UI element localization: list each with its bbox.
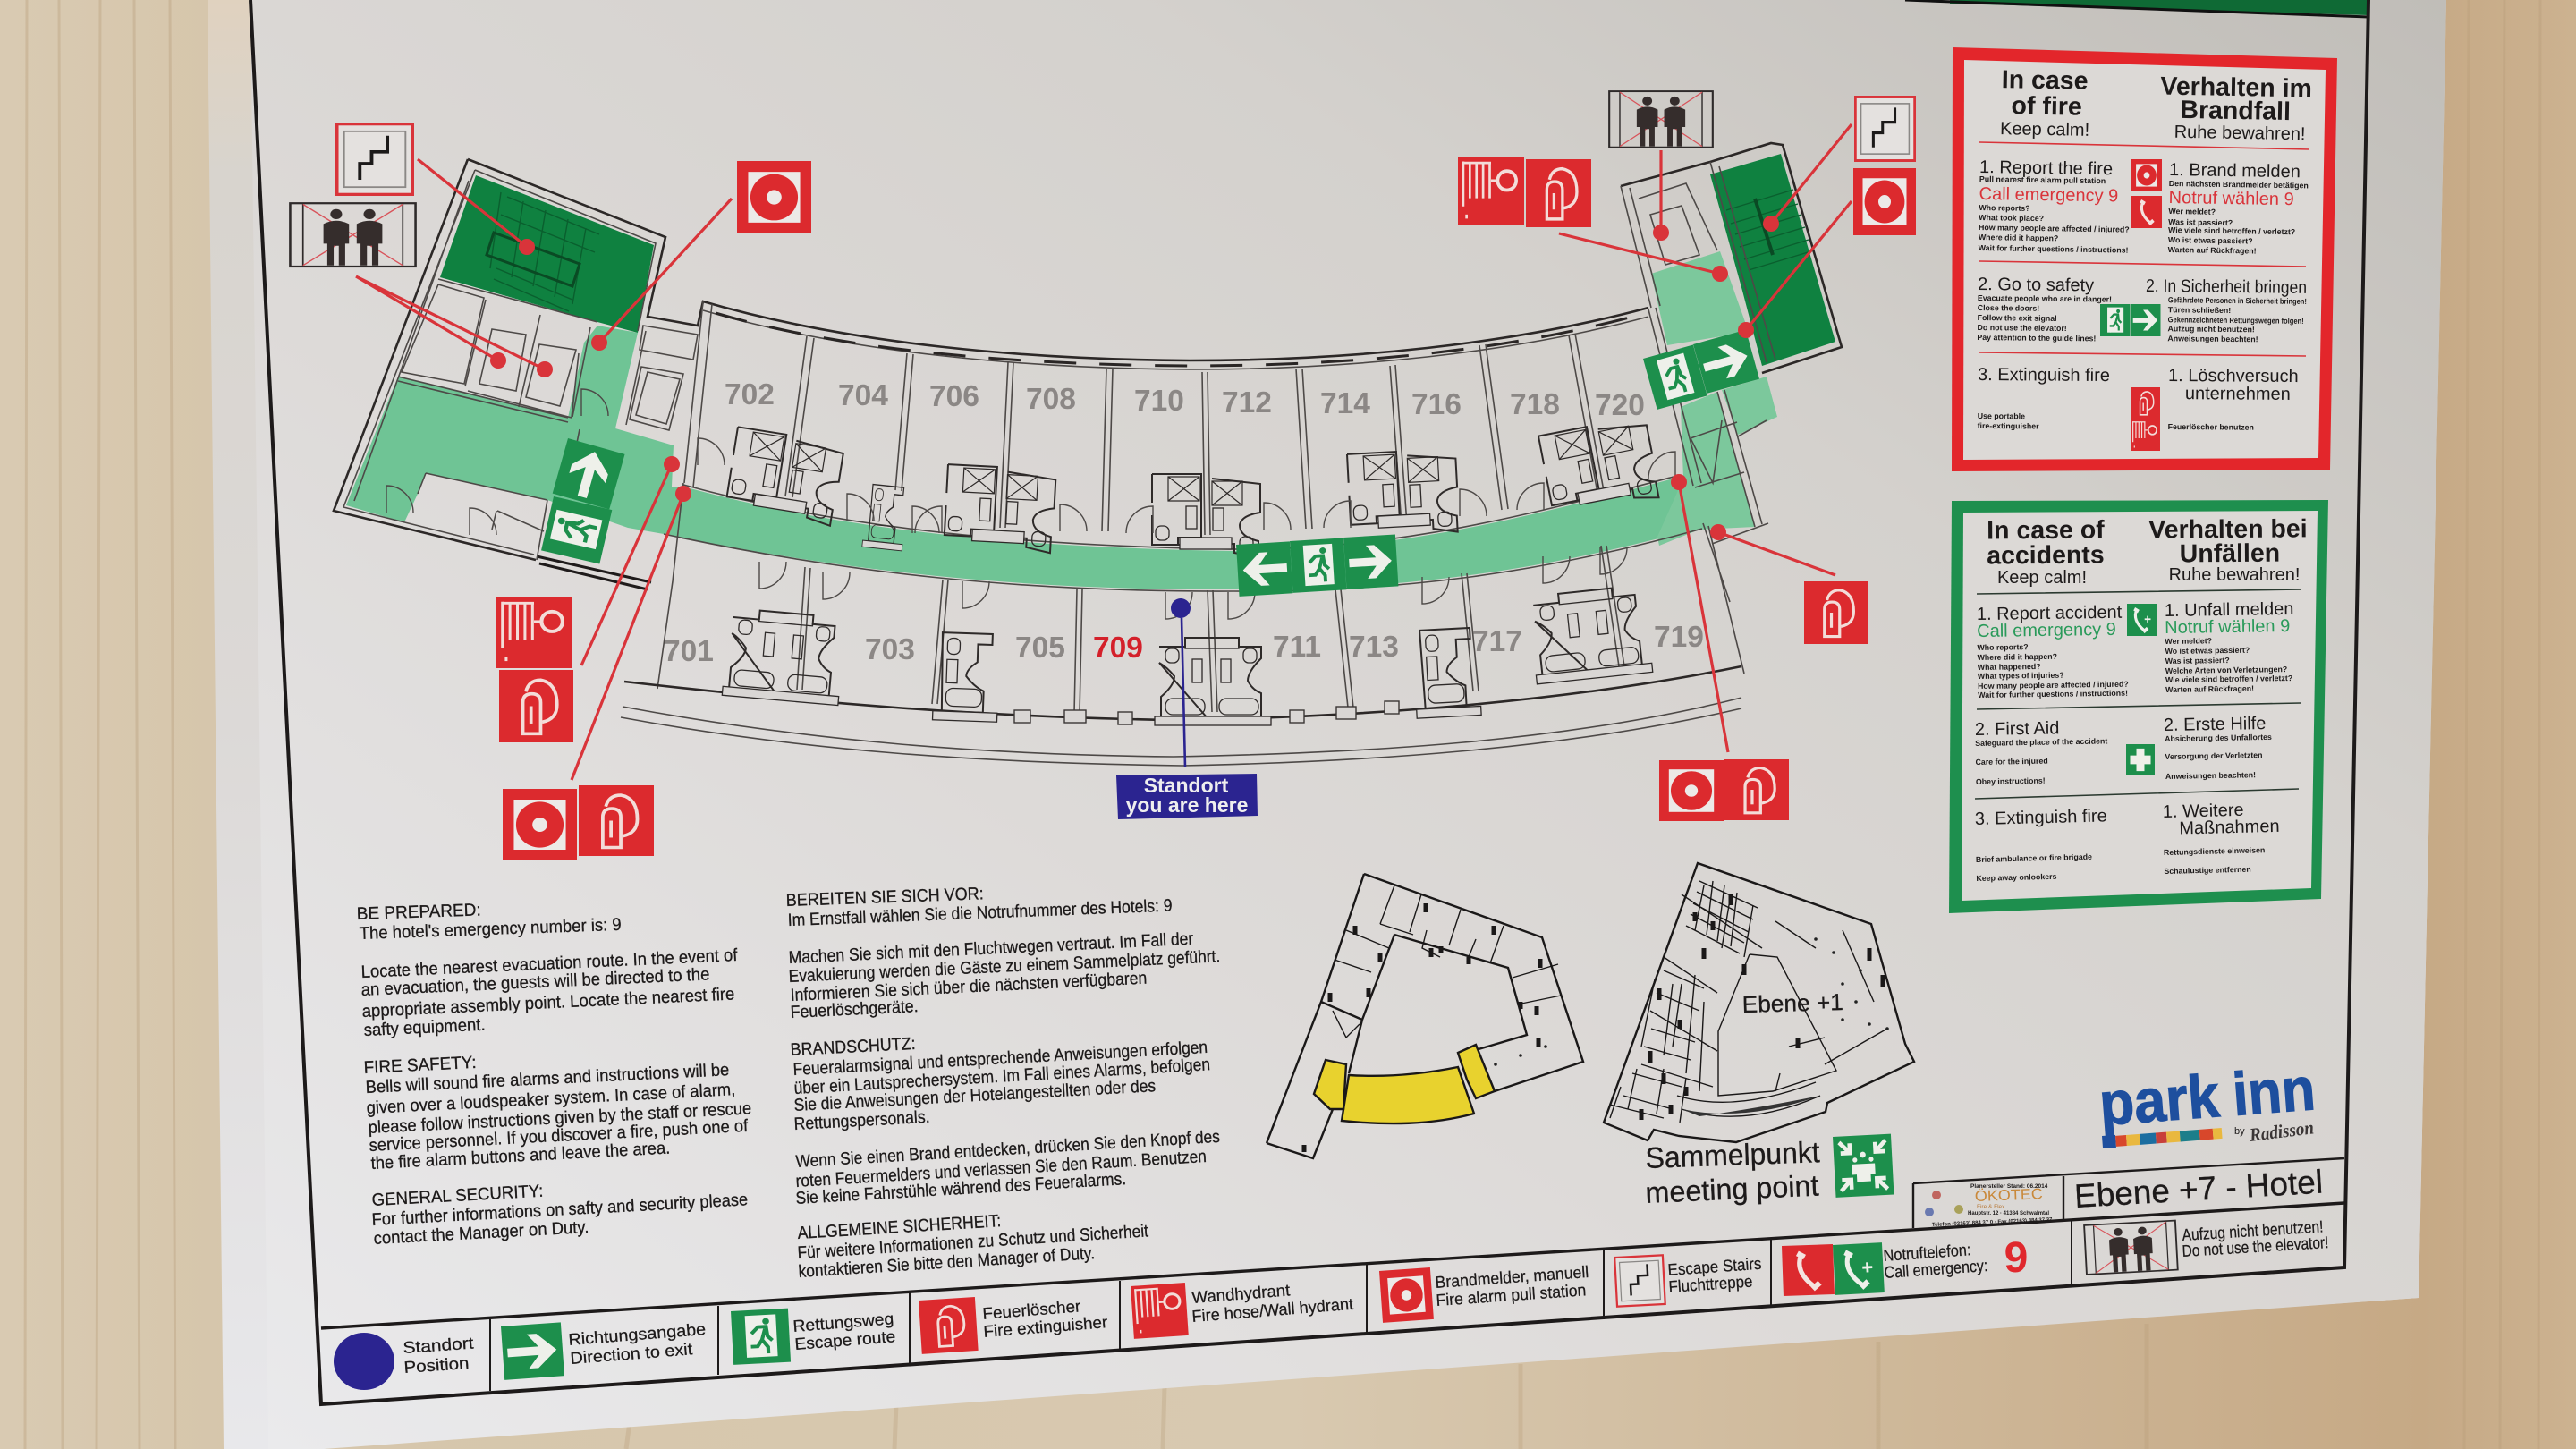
plan maker stamp: Telefon (02163) 884 37 0 · Fax (02163) 884 37 37 — [1932, 1217, 2053, 1228]
legend: emergency phone: 9 — [2004, 1234, 2028, 1282]
room numbers: 702 — [724, 378, 775, 411]
icon: extinguisher right — [1804, 581, 1868, 644]
right corridor escape area — [1657, 392, 1755, 546]
fire panel icon: arrow — [2131, 304, 2161, 336]
legend: stairs: Escape Stairs — [1667, 1254, 1762, 1279]
accident panel headings — [1987, 514, 2308, 588]
icon: meeting point — [1833, 1134, 1894, 1198]
fire panel headings: of fire — [2011, 91, 2082, 122]
text block: german safety instructions: ALLGEMEINE SICHERHEIT: — [797, 1211, 1002, 1243]
fire panel step 2 english — [1977, 275, 2112, 343]
legend: extinguisher: Feuerlöscher — [982, 1296, 1081, 1323]
accident panel step 1 german — [2165, 599, 2295, 694]
accident panel step 1 english: Who reports? — [1977, 642, 2029, 652]
text block: german safety instructions: Sie keine Fahrstühle während des Feueralarms. — [795, 1169, 1127, 1208]
panel: in case of accidents — [1949, 500, 2328, 913]
icon: extinguisher lower left — [499, 670, 573, 742]
fire panel step 2 german: 2. In Sicherheit bringen — [2146, 276, 2307, 298]
room numbers: 703 — [865, 633, 915, 666]
fire panel headings: Brandfall — [2180, 96, 2291, 126]
sign black frame — [250, 0, 2368, 1404]
room numbers: 709 — [1093, 631, 1143, 665]
accident panel dividers — [1975, 589, 2301, 799]
room numbers — [664, 378, 1704, 668]
text block: english safety instructions: service personnel. If you discover a fire, push one of — [369, 1116, 749, 1156]
fire panel icon: extinguisher — [2131, 387, 2160, 419]
room numbers: 711 — [1273, 631, 1321, 664]
accident panel headings: Keep calm! — [1997, 568, 2087, 588]
icon: fire alarm top right — [1853, 168, 1916, 235]
accident panel step 2 german: 2. Erste Hilfe — [2164, 714, 2267, 735]
fire panel step 3 german — [2168, 366, 2299, 432]
icon: no elevator top right — [1609, 91, 1713, 148]
level label: Ebene +1 — [1741, 988, 1843, 1018]
fire panel step 1 english: 1. Report the fire — [1979, 157, 2113, 179]
room numbers: 704 — [838, 379, 888, 412]
accident panel step 2 german: Anweisungen beachten! — [2165, 770, 2256, 781]
fire panel headings: Verhalten im — [2160, 72, 2312, 103]
legend: emergency phone: Call emergency: — [1884, 1256, 1988, 1282]
text block: english safety instructions: For further informations on safty and security please — [371, 1190, 749, 1230]
icon: hose top centre — [1458, 157, 1524, 225]
accident panel icon: first aid cross — [2126, 744, 2155, 775]
accident panel step 2 english: Safeguard the place of the accident — [1975, 736, 2107, 748]
legend: position — [334, 1333, 474, 1390]
you are here marker: you are here — [1126, 793, 1248, 817]
doors — [386, 389, 1675, 619]
logo: park inn by Radisson — [2097, 1055, 2318, 1148]
legend — [334, 1216, 2329, 1390]
legend: elevator: Do not use the elevator! — [2182, 1233, 2329, 1260]
legend: alarm: Fire alarm pull station — [1436, 1280, 1587, 1309]
legend: escape route: Escape route — [794, 1326, 896, 1353]
accident panel icon: phone — [2127, 604, 2157, 636]
legend: extinguisher — [919, 1296, 1108, 1354]
panel: in case of fire — [1952, 47, 2337, 471]
top green bar — [1905, 0, 2368, 17]
text block: english safety instructions: given over a loudspeaker system. In case of alarm, — [366, 1080, 736, 1118]
accident panel step 3 english: Keep away onlookers — [1976, 872, 2057, 883]
plan maker stamp: Planersteller Stand: 06.2014 — [1970, 1183, 2048, 1190]
room numbers: 720 — [1595, 389, 1645, 422]
accident panel step 1 german: Wer meldet? — [2165, 636, 2212, 646]
text block: german safety instructions: Informieren Sie sich über die nächsten verfügbaren — [790, 969, 1148, 1005]
text block: english safety instructions: the fire alarm buttons and leave the area. — [370, 1138, 671, 1174]
legend: escape route: Rettungsweg — [792, 1309, 894, 1335]
fire panel headings — [2000, 65, 2312, 144]
accident panel headings: Verhalten bei — [2148, 514, 2308, 545]
legend: hose: Fire hose/Wall hydrant — [1191, 1294, 1354, 1326]
accident panel step 3 german: Schaulustige entfernen — [2164, 865, 2251, 876]
icon: fire alarm bottom left — [503, 789, 577, 860]
text block: english safety instructions: BE PREPARED: — [356, 900, 481, 924]
title: Ebene +7 - Hotel: Ebene +7 - Hotel — [2073, 1164, 2324, 1215]
accident panel step 3 english — [1975, 806, 2108, 883]
meeting point label: Sammelpunkt — [1645, 1135, 1820, 1174]
room numbers: 712 — [1222, 386, 1272, 419]
fire panel step 2 german: Gekennzeichneten Rettungswegen folgen! — [2168, 315, 2304, 326]
fire panel step 2 english: Do not use the elevator! — [1978, 323, 2067, 333]
fire panel step 3 german: 1. Löschversuch — [2168, 366, 2299, 386]
fire panel step 1 english: What took place? — [1979, 213, 2044, 223]
fire panel step 1 german: Notruf wählen 9 — [2168, 188, 2294, 209]
left lobby escape area — [346, 326, 688, 534]
plan maker stamp: ÖKOTEC — [1974, 1185, 2043, 1205]
fire panel headings: Ruhe bewahren! — [2174, 123, 2306, 144]
text block: english safety instructions: Locate the nearest evacuation route. In the event of — [360, 945, 738, 982]
plan maker stamp — [1925, 1183, 2053, 1228]
fire panel step 2 english: Pay attention to the guide lines! — [1977, 333, 2097, 343]
room divider walls — [785, 334, 1624, 714]
accident panel step 1 german: Was ist passiert? — [2165, 656, 2230, 665]
icon: fire alarm lower right — [1659, 760, 1724, 821]
fire panel step 1 german: Wer meldet? — [2168, 207, 2216, 216]
meeting point label: meeting point — [1645, 1169, 1819, 1209]
room numbers: 713 — [1349, 631, 1399, 664]
fire panel step 1 german: Warten auf Rückfragen! — [2168, 245, 2257, 256]
room numbers: 710 — [1134, 385, 1184, 418]
logo: park inn by Radisson: Radisson — [2248, 1116, 2315, 1146]
you are here marker: Standort — [1144, 774, 1229, 797]
room numbers: 706 — [929, 380, 979, 413]
accident panel headings: Ruhe bewahren! — [2169, 565, 2300, 585]
accident panel step 1 german: Wie viele sind betroffen / verletzt? — [2165, 674, 2292, 684]
right stair core escape area — [1651, 251, 1749, 345]
highlighted wing in yellow — [1314, 1045, 1495, 1123]
accident panel step 2 english — [1975, 717, 2108, 786]
bathrooms — [722, 416, 1660, 725]
fire panel headings: In case — [2002, 65, 2089, 96]
icon: stairs top right — [1854, 96, 1916, 162]
icon: extinguisher bottom left — [579, 785, 654, 856]
fire panel icon: phone — [2131, 196, 2162, 228]
sign: exit and arrow, right — [1643, 330, 1759, 410]
sign: corridor arrows and exit — [1236, 534, 1398, 597]
fire panel step 1 english: How many people are affected / injured? — [1979, 223, 2130, 234]
text block: english safety instructions: please follow instructions given by the staff or rescue — [368, 1098, 752, 1138]
icon: extinguisher lower right — [1724, 759, 1789, 820]
accident panel step 2 english: 2. First Aid — [1975, 718, 2060, 740]
legend: direction: Richtungsangabe — [568, 1319, 707, 1349]
escape route corridor — [664, 479, 1702, 589]
sign: up arrow and exit, left — [541, 438, 625, 564]
fire panel step 1 english: Pull nearest fire alarm pull station — [1979, 174, 2106, 185]
accident panel step 2 german: Versorgung der Verletzten — [2165, 750, 2263, 761]
mini map: hotel floor locator — [1267, 874, 1583, 1158]
text block: german safety instructions: Machen Sie sich mit den Fluchtwegen vertraut. Im Fall der — [788, 929, 1194, 968]
fire panel step 2 german — [2145, 276, 2307, 344]
corridor walls — [664, 529, 1702, 591]
icon: hose lower left — [496, 597, 572, 668]
accident panel step 1 english: Where did it happen? — [1978, 652, 2057, 662]
text block: english safety instructions: Bells will sound fire alarms and instructions will be — [365, 1060, 730, 1097]
room numbers: 701 — [664, 635, 714, 668]
accident panel step 1 german: Welche Arten von Verletzungen? — [2165, 665, 2287, 675]
meeting point label — [1645, 1135, 1820, 1209]
text block: german safety instructions: Wenn Sie einen Brand entdecken, drücken Sie den Knopf des — [795, 1127, 1221, 1172]
accident panel step 1 english: How many people are affected / injured? — [1978, 680, 2129, 691]
room numbers: 718 — [1510, 388, 1560, 421]
fire panel step 1 german: Wie viele sind betroffen / verletzt? — [2168, 225, 2295, 236]
accident panel step 2 english: Obey instructions! — [1976, 776, 2046, 786]
fire panel step 3 german: unternehmen — [2185, 384, 2291, 404]
plan maker stamp: Fire & Flex — [1977, 1204, 2005, 1210]
accident panel step 1 english: Call emergency 9 — [1977, 620, 2116, 641]
legend: alarm: Brandmelder, manuell — [1435, 1262, 1589, 1292]
text block: english safety instructions: The hotel's emergency number is: 9 — [359, 915, 622, 944]
legend: extinguisher: Fire extinguisher — [983, 1312, 1108, 1341]
room numbers: 719 — [1654, 621, 1704, 654]
fire panel icon: exit — [2100, 304, 2131, 336]
text block: english safety instructions: an evacuation, the guests will be directed to the — [360, 964, 710, 1000]
fire panel icon: hose — [2131, 419, 2160, 451]
accident panel headings: In case of — [1987, 516, 2105, 545]
legend: stairs — [1614, 1254, 1762, 1308]
room numbers: 716 — [1411, 388, 1462, 421]
accident panel headings: Unfällen — [2180, 539, 2280, 568]
fire panel step 3 english — [1978, 365, 2110, 431]
accident panel step 1 english: What types of injuries? — [1978, 671, 2064, 681]
logo: park inn by Radisson: park — [2097, 1062, 2222, 1139]
locator outline — [1267, 874, 1583, 1158]
accident panel step 3 english: Brief ambulance or fire brigade — [1976, 852, 2092, 864]
legend: emergency phone: Notruftelefon: — [1883, 1240, 1971, 1265]
room numbers: 708 — [1026, 383, 1076, 416]
legend: direction — [501, 1319, 707, 1380]
accident panel step 2 german: Absicherung des Unfallortes — [2165, 733, 2272, 743]
left staircase — [440, 175, 654, 333]
legend: position: Standort — [402, 1334, 474, 1357]
fire panel step 1 german: Den nächsten Brandmelder betätigen — [2169, 179, 2309, 190]
logo: park inn by Radisson: inn — [2230, 1055, 2318, 1129]
accident panel step 1 english — [1977, 603, 2129, 699]
accident panel step 1 english: 1. Report accident — [1977, 603, 2123, 624]
building walls — [334, 143, 1842, 766]
accident panel step 3 german: Maßnahmen — [2179, 817, 2280, 839]
accident panel step 3 german: 1. Weitere — [2163, 801, 2244, 822]
accident panel step 1 english: What happened? — [1978, 662, 2041, 672]
text block: german safety instructions: kontaktieren Sie bitte den Manager of Duty. — [798, 1243, 1096, 1282]
facade pillars — [1014, 701, 1399, 724]
accident panel step 3 german — [2163, 800, 2281, 876]
text block: german safety instructions: Feuerlöschgeräte. — [790, 996, 919, 1022]
fire panel step 3 english: 3. Extinguish fire — [1978, 365, 2110, 386]
accident panel step 1 german: Warten auf Rückfragen! — [2165, 684, 2254, 694]
text block: english safety instructions — [356, 900, 752, 1249]
legend: stairs: Fluchttreppe — [1668, 1271, 1753, 1296]
fire panel step 1 english: Who reports? — [1979, 203, 2030, 213]
right lower escape area — [1722, 377, 1777, 435]
fire panel step 2 english: Follow the exit signal — [1978, 313, 2057, 323]
fire panel step 2 german: Gefährdete Personen in Sicherheit bringen! — [2168, 295, 2307, 306]
plan maker stamp: Hauptstr. 12 · 41384 Schwalmtal — [1968, 1211, 2049, 1216]
mini map: level +1 with meeting point — [1604, 863, 1914, 1142]
legend: alarm — [1379, 1262, 1589, 1323]
text block: german safety instructions: roten Feuermelders und verlassen Sie den Raum. Benutzen — [795, 1147, 1207, 1191]
text block: english safety instructions: safty equipment. — [363, 1015, 486, 1040]
facade and balcony lines — [624, 666, 1741, 720]
fire panel step 1 english: Call emergency 9 — [1979, 184, 2118, 206]
fire panel step 1 german: Wo ist etwas passiert? — [2168, 235, 2253, 245]
accident panel step 3 english: 3. Extinguish fire — [1975, 806, 2107, 829]
text block: german safety instructions: BEREITEN SIE SICH VOR: — [785, 884, 984, 911]
icon: stairs top left — [335, 123, 414, 196]
fire panel dividers — [1979, 142, 2309, 356]
you are here marker — [1116, 598, 1258, 819]
text block: german safety instructions: Für weitere Informationen zu Schutz und Sicherheit — [797, 1221, 1149, 1263]
legend: elevator — [2084, 1216, 2329, 1275]
fire panel step 3 german: Feuerlöscher benutzen — [2168, 422, 2254, 432]
fire panel step 2 english: 2. Go to safety — [1978, 275, 2094, 295]
fire panel step 2 german: Türen schließen! — [2168, 305, 2231, 315]
text block: german safety instructions: über ein Lautsprechersystem. Im Fall eines Alarms, befolgen — [793, 1055, 1211, 1098]
legend: hose: Wandhydrant — [1191, 1280, 1291, 1307]
text block: english safety instructions: FIRE SAFETY: — [363, 1053, 477, 1078]
text block: german safety instructions: Evakuierung werden die Gäste zu einem Sammelplatz geführt. — [788, 946, 1221, 987]
fire panel step 2 english: Evacuate people who are in danger! — [1978, 293, 2112, 304]
icon: fire alarm top left — [737, 161, 811, 233]
fire panel step 1 english: Wait for further questions / instructions! — [1979, 243, 2129, 255]
legend: position: Position — [403, 1353, 470, 1377]
room numbers: 714 — [1320, 387, 1370, 420]
accident panel headings: accidents — [1987, 541, 2105, 570]
red leader lines and dots — [356, 124, 1852, 780]
room numbers: 717 — [1472, 625, 1522, 658]
fire panel step 1 german: Was ist passiert? — [2168, 217, 2233, 227]
text block: english safety instructions: GENERAL SECURITY: — [371, 1182, 544, 1210]
text block: german safety instructions: Feueralarmsignal und entsprechende Anweisungen erfolgen — [792, 1038, 1208, 1080]
fire panel step 1 english — [1979, 157, 2131, 255]
fire panel step 1 german: 1. Brand melden — [2169, 160, 2301, 182]
right staircase — [1710, 154, 1835, 366]
fire panel step 1 german — [2168, 160, 2309, 256]
text block: german safety instructions: Im Ernstfall wählen Sie die Notrufnummer des Hotels: 9 — [787, 896, 1173, 930]
fire panel icon: alarm — [2131, 159, 2162, 191]
text block: english safety instructions: contact the Manager on Duty. — [373, 1217, 589, 1249]
floor plan — [334, 124, 1852, 819]
legend: emergency phone — [1782, 1234, 2028, 1296]
fire panel step 2 german: Aufzug nicht benutzen! — [2168, 324, 2255, 334]
fire panel step 1 english: Where did it happen? — [1979, 233, 2058, 242]
legend: elevator: Aufzug nicht benutzen! — [2182, 1216, 2324, 1244]
fire panel step 3 english: Use portable — [1978, 411, 2025, 420]
icon: no elevator top left — [290, 203, 416, 267]
text block: german safety instructions — [785, 884, 1221, 1282]
accident panel step 1 german: Wo ist etwas passiert? — [2165, 646, 2250, 656]
room numbers: 705 — [1015, 631, 1065, 665]
accident panel step 2 english: Care for the injured — [1975, 757, 2048, 767]
lift lobby rooms — [398, 279, 597, 422]
text block: german safety instructions: Sie die Anweisungen der Hotelangestellten oder des — [793, 1076, 1157, 1115]
fire panel step 2 german: Anweisungen beachten! — [2167, 334, 2258, 343]
fire panel step 3 english: fire-extinguisher — [1978, 421, 2039, 430]
text block: english safety instructions: appropriate assembly point. Locate the nearest fire — [361, 984, 735, 1021]
fire panel headings: Keep calm! — [2000, 119, 2089, 140]
legend: hose — [1131, 1280, 1354, 1339]
icon: extinguisher top centre — [1526, 159, 1591, 227]
accident panel step 3 german: Rettungsdienste einweisen — [2164, 845, 2265, 857]
accident panel step 1 german: 1. Unfall melden — [2165, 599, 2294, 621]
accident panel step 1 english: Wait for further questions / instructions! — [1978, 689, 2128, 699]
accident panel step 1 german: Notruf wählen 9 — [2165, 616, 2290, 638]
text block: german safety instructions: Rettungspersonals. — [793, 1107, 930, 1134]
text block: german safety instructions: BRANDSCHUTZ: — [790, 1034, 916, 1060]
logo: park inn by Radisson: by — [2234, 1126, 2245, 1137]
legend: escape route — [731, 1309, 896, 1365]
legend: direction: Direction to exit — [570, 1339, 693, 1368]
accident panel step 2 german — [2164, 714, 2273, 781]
fire panel step 2 english: Close the doors! — [1978, 303, 2039, 313]
